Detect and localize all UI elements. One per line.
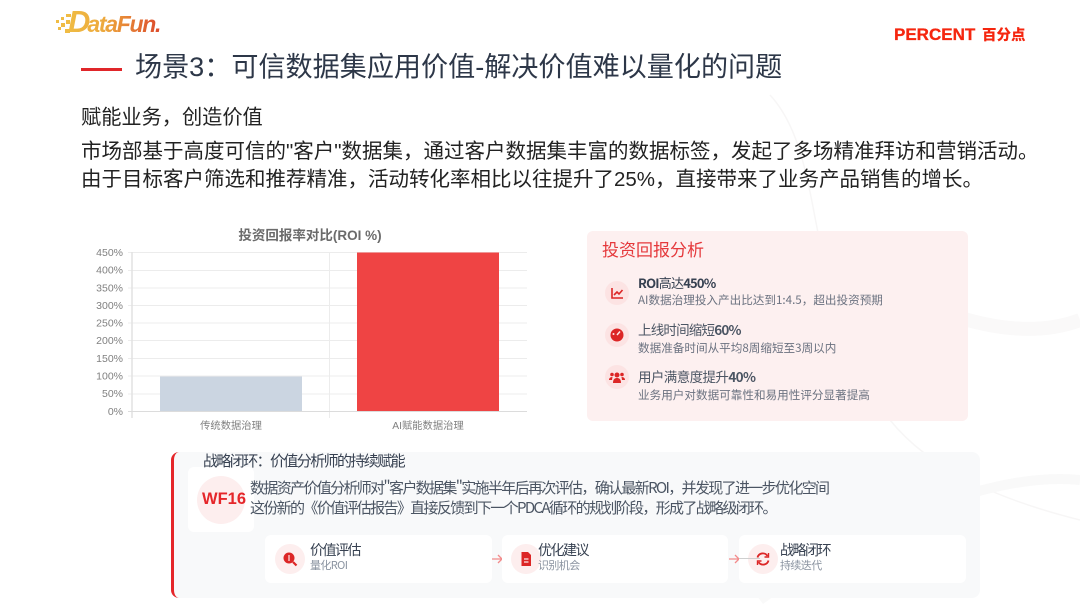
arrow: step 1 to step 2 (492, 554, 502, 564)
step card: optimization (502, 535, 728, 583)
strategic loop text (250, 477, 829, 518)
wordmark CJK: 百分点 (982, 24, 1026, 45)
y axis labels: 300% (96, 300, 123, 312)
panel: ROI analysis (587, 231, 968, 421)
y axis labels: 250% (96, 318, 123, 330)
badge circle (197, 476, 245, 524)
bar: AI governance (357, 252, 499, 411)
y axis labels: 350% (96, 282, 123, 294)
strategic loop text: 这份新的《价值评估报告》直接反馈到下一个PDCA循环的规划阶段，形成了战略级闭环。 (250, 497, 776, 518)
item: satisfaction detail: 业务用户对数据可靠性和易用性评分显著提高 (638, 387, 870, 403)
y axis labels: 450% (96, 247, 123, 259)
step card: strategic loop (739, 535, 966, 583)
arrow: step 2 to step 3 (729, 554, 739, 564)
intro paragraph: 由于目标客户筛选和推荐精准，活动转化率相比以往提升了25%，直接带来了业务产品销售的增长。 (81, 168, 983, 191)
icon: search dollar (275, 544, 305, 574)
y axis labels: 50% (102, 388, 123, 400)
logo: PERCENT 百分点 (894, 24, 1026, 45)
chart title: 投资回报率对比(ROI %) (238, 227, 382, 243)
step subtitle: 识别机会 (538, 557, 580, 573)
item: time detail: 数据准备时间从平均8周缩短至3周以内 (638, 340, 836, 356)
y axis labels (96, 247, 123, 418)
badge text: WF16 (202, 490, 246, 508)
icon: gauge (605, 323, 629, 347)
step title: 战略闭环 (780, 540, 830, 560)
title accent bar (81, 68, 122, 71)
step subtitle: 持续迭代 (780, 557, 822, 573)
bar: traditional governance (160, 376, 302, 411)
icon: users (605, 365, 629, 389)
y axis labels: 100% (96, 370, 123, 382)
step card: value assessment (265, 535, 492, 583)
x axis labels: AI赋能数据治理 (392, 419, 464, 432)
panel: strategic loop (171, 452, 980, 598)
wordmark: PERCENT (894, 25, 975, 44)
icon: refresh (748, 544, 778, 574)
item: satisfaction: 用户满意度提升40% (638, 366, 755, 386)
step subtitle: 量化ROI (310, 557, 347, 573)
x axis labels: 传统数据治理 (200, 419, 262, 432)
step title: 优化建议 (538, 540, 588, 560)
intro paragraph (81, 140, 1039, 191)
strategic loop heading: 战略闭环：价值分析师的持续赋能 (203, 450, 404, 471)
subheading: 赋能业务，创造价值 (81, 107, 263, 129)
item: ROI: ROI高达450% (638, 273, 716, 292)
x axis labels (200, 419, 464, 432)
logo: DataFun (56, 11, 160, 33)
y axis labels: 150% (96, 353, 123, 365)
WF16 badge (188, 467, 254, 532)
item: ROI detail: AI数据治理投入产出比达到1:4.5，超出投资预期 (638, 292, 883, 308)
y axis labels: 400% (96, 264, 123, 276)
bar chart: ROI comparison (96, 227, 527, 432)
y axis labels: 0% (108, 406, 123, 418)
step title: 价值评估 (310, 540, 360, 560)
intro paragraph: 市场部基于高度可信的"客户"数据集，通过客户数据集丰富的数据标签，发起了多场精准拜访和营销活动。 (81, 140, 1039, 163)
icon: document (511, 544, 541, 574)
strategic loop text: 数据资产价值分析师对"客户数据集"实施半年后再次评估，确认最新ROI，并发现了进一步优化空间 (250, 477, 828, 498)
panel heading: 投资回报分析 (602, 236, 704, 261)
y axis labels: 200% (96, 335, 123, 347)
icon: line chart (605, 281, 629, 305)
title: 场景3：可信数据集应用价值-解决价值难以量化的问题 (135, 51, 782, 82)
grid lines (128, 252, 527, 418)
item: time to launch: 上线时间缩短60% (638, 319, 741, 339)
connector line (739, 558, 760, 559)
